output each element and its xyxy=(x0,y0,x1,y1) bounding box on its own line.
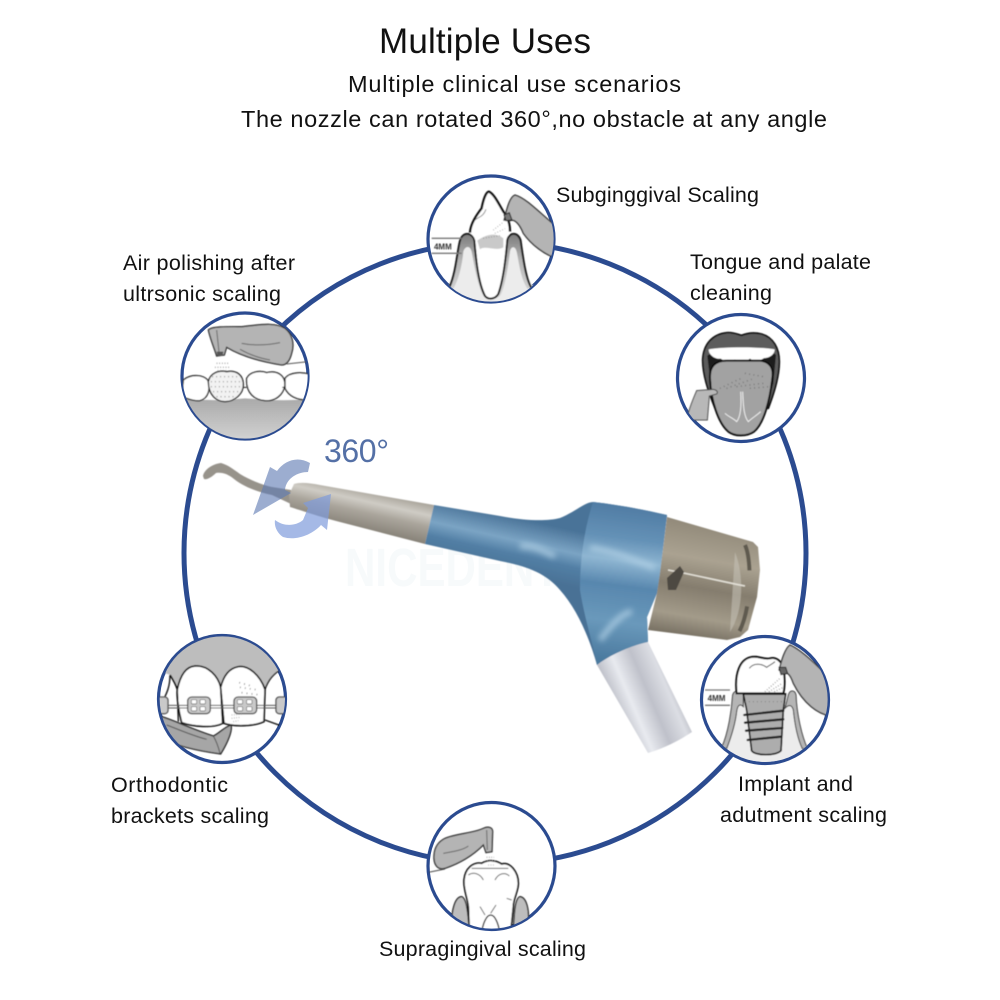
nozzle tip xyxy=(203,463,291,504)
cap dark mark xyxy=(667,566,684,590)
large connecting ring xyxy=(184,242,806,864)
label: air polishing: ultrsonic scaling xyxy=(123,282,281,306)
silver connector xyxy=(597,642,692,753)
label: implant and abutment scaling xyxy=(720,772,887,827)
handpiece illustration xyxy=(203,463,760,753)
cap window line xyxy=(668,570,745,586)
title: Multiple Uses xyxy=(379,22,591,61)
blue body shell xyxy=(580,502,667,665)
label: tongue and palate cleaning xyxy=(690,250,871,305)
label: air polishing xyxy=(123,251,295,306)
circle: subgingival scaling xyxy=(428,176,557,303)
cap end rim xyxy=(738,545,750,634)
circle: orthodontic brackets scaling xyxy=(153,633,290,762)
blue tube and body xyxy=(425,502,667,665)
faint watermark: NICEDENT xyxy=(345,538,560,598)
tooth and gum drawing: 4MM xyxy=(434,242,452,251)
circle background xyxy=(702,636,828,764)
circle: implant and abutment scaling xyxy=(702,636,832,764)
implant drawing: 4MM xyxy=(708,694,726,703)
body highlight xyxy=(520,546,655,640)
subtitle line 1: Multiple clinical use scenarios xyxy=(348,71,681,97)
mouth and tongue drawing xyxy=(687,333,779,435)
label: orthodontic brackets scaling xyxy=(111,773,269,828)
teeth and handpiece drawing xyxy=(182,324,312,443)
circle background xyxy=(158,636,286,762)
circle: tongue and palate cleaning xyxy=(678,314,804,442)
infographic canvas xyxy=(112,28,886,960)
label: tongue and palate cleaning: Tongue and palate xyxy=(690,250,871,274)
rotation arrows xyxy=(253,460,331,538)
label: implant and abutment scaling: adutment scaling xyxy=(720,803,887,827)
upper rotation arrow xyxy=(253,460,310,515)
label: subgingival scaling: Subginggival Scaling xyxy=(556,183,759,207)
360 degree label: 360° xyxy=(324,433,389,469)
powder cap xyxy=(648,517,760,640)
circle background xyxy=(678,314,804,442)
label: orthodontic brackets scaling: Orthodontic xyxy=(111,773,228,797)
label: air polishing: Air polishing after xyxy=(123,251,295,275)
lower rotation arrow xyxy=(275,494,331,538)
label: implant and abutment scaling: Implant and xyxy=(738,772,853,796)
circle: supragingival scaling xyxy=(427,802,555,933)
steel shaft xyxy=(289,483,434,544)
braces drawing xyxy=(153,633,290,754)
label: supragingival scaling: Supragingival scaling xyxy=(379,937,586,961)
cap inner reflection xyxy=(730,552,741,632)
circle background xyxy=(428,802,555,930)
circle: air polishing after ultrasonic scaling xyxy=(182,313,312,443)
circle background xyxy=(428,176,554,302)
label: orthodontic brackets scaling: brackets scaling xyxy=(111,804,269,828)
circle background xyxy=(182,313,308,439)
tooth and handpiece drawing xyxy=(427,827,529,933)
label: tongue and palate cleaning: cleaning xyxy=(690,281,772,305)
subtitle line 2: The nozzle can rotated 360°,no obstacle at any angle xyxy=(241,106,827,132)
